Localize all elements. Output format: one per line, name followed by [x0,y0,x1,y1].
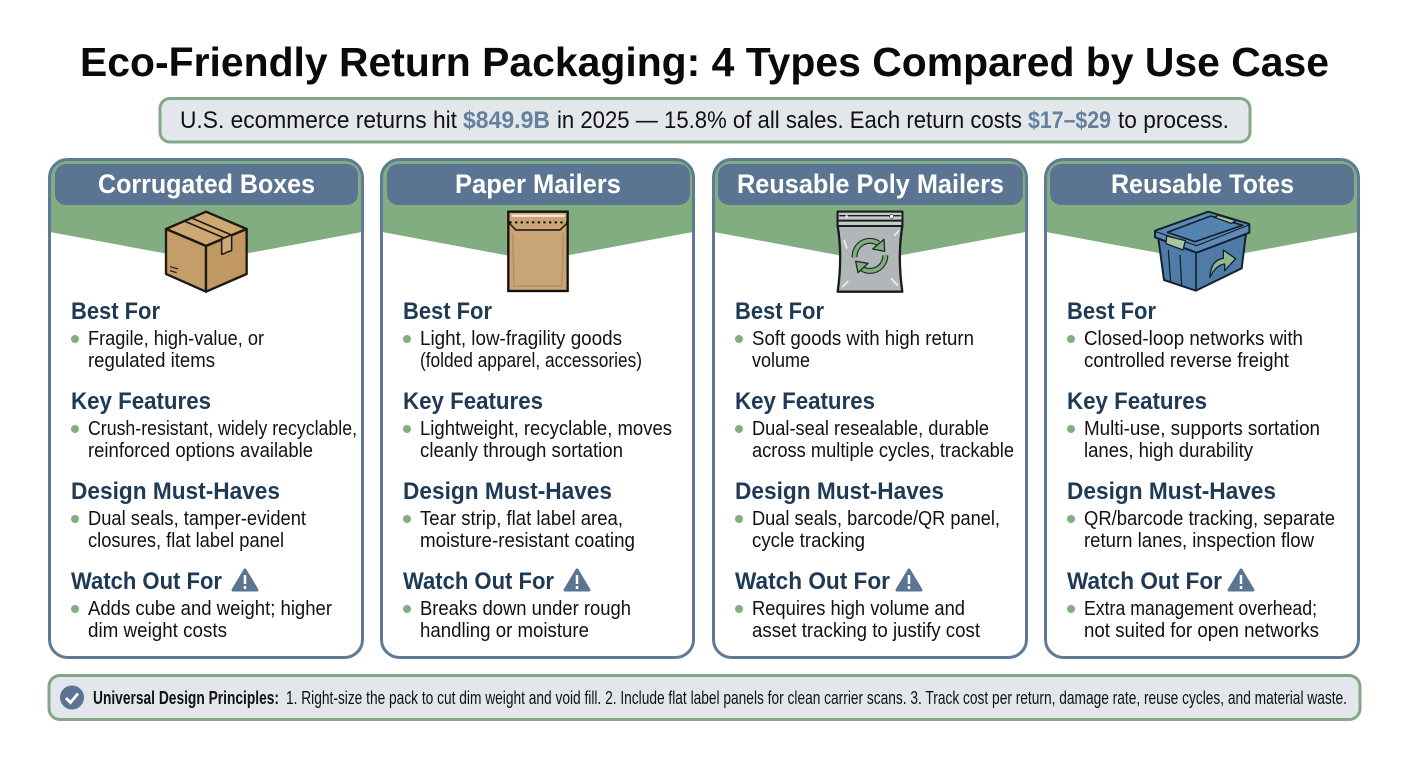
design must-haves: QR/barcode tracking, separate [1084,507,1335,530]
watch out for: Breaks down under rough [420,597,631,620]
key features: reinforced options available [88,439,313,462]
design must-haves [735,478,1000,552]
design must-haves: Design Must-Haves [1067,478,1276,505]
key features [71,388,357,462]
design must-haves: Design Must-Haves [403,478,612,505]
watch out for: Watch Out For [735,568,890,595]
icon: paper mailer [508,212,568,291]
watch out for: Extra management overhead; [1084,597,1317,620]
stats banner: $849.9B [463,107,550,134]
key features: Key Features [403,388,543,415]
watch out for: asset tracking to justify cost [752,619,980,642]
stats banner: $17–$29 [1028,107,1111,134]
key features [735,388,1014,462]
best for: regulated items [88,349,215,372]
key features [403,388,672,462]
design must-haves: Dual seals, tamper-evident [88,507,306,530]
best for: Light, low-fragility goods [420,327,622,350]
watch out for: Adds cube and weight; higher [88,597,332,620]
key features: cleanly through sortation [420,439,623,462]
design must-haves: cycle tracking [752,529,865,552]
panel: reusable totes [1046,160,1358,658]
key features: across multiple cycles, trackable [752,439,1014,462]
best for: Best For [1067,298,1156,325]
icon: cardboard box [166,212,247,292]
stats banner: in 2025 — 15.8% of all sales. Each return costs [557,107,1022,134]
watch out for: Watch Out For [403,568,554,595]
best for [403,298,642,372]
best for: Fragile, high-value, or [88,327,264,350]
design must-haves: Design Must-Haves [71,478,280,505]
best for [735,298,974,372]
watch out for: handling or moisture [420,619,589,642]
stats banner: to process. [1118,107,1229,134]
best for: (folded apparel, accessories) [420,349,642,372]
watch out for [403,568,631,642]
heading: reusable totes: Reusable Totes [1111,169,1294,199]
stats banner [160,98,1250,142]
best for: Best For [71,298,160,325]
design must-haves [71,478,306,552]
key features: Lightweight, recyclable, moves [420,417,672,440]
watch out for [71,568,332,642]
best for [1067,298,1303,372]
watch out for: dim weight costs [88,619,227,642]
key features: lanes, high durability [1084,439,1254,462]
icon: poly mailer [838,212,902,292]
best for: Best For [735,298,824,325]
key features: Key Features [1067,388,1207,415]
best for: controlled reverse freight [1084,349,1289,372]
best for: Soft goods with high return [752,327,974,350]
icon: reusable tote [1155,212,1249,291]
watch out for: Watch Out For [71,568,222,595]
watch out for [735,568,980,642]
key features: Key Features [71,388,211,415]
watch out for: not suited for open networks [1084,619,1319,642]
universal design principles bar [49,676,1360,720]
design must-haves: Dual seals, barcode/QR panel, [752,507,1000,530]
key features: Multi-use, supports sortation [1084,417,1320,440]
key features: Crush-resistant, widely recyclable, [88,417,357,440]
heading: paper mailers: Paper Mailers [455,169,621,199]
best for: volume [752,349,810,372]
design must-haves [403,478,635,552]
universal design principles bar: Universal Design Principles: [93,688,279,708]
best for: Closed-loop networks with [1084,327,1303,350]
title: Eco-Friendly Return Packaging: 4 Types Compared by Use Case [80,39,1329,85]
stats banner: U.S. ecommerce returns hit [180,107,457,134]
best for [71,298,264,372]
best for: Best For [403,298,492,325]
design must-haves: moisture-resistant coating [420,529,635,552]
key features [1067,388,1320,462]
icon: check badge [60,686,84,710]
panel: corrugated boxes [50,160,362,658]
panel: paper mailers [382,160,694,658]
design must-haves [1067,478,1335,552]
watch out for: Watch Out For [1067,568,1222,595]
watch out for: Requires high volume and [752,597,965,620]
design must-haves: return lanes, inspection flow [1084,529,1314,552]
design must-haves: closures, flat label panel [88,529,284,552]
heading: corrugated boxes: Corrugated Boxes [98,169,315,199]
heading: reusable poly mailers: Reusable Poly Mailers [737,169,1004,199]
panel: reusable poly mailers [714,160,1026,658]
key features: Key Features [735,388,875,415]
watch out for [1067,568,1319,642]
design must-haves: Design Must-Haves [735,478,944,505]
key features: Dual-seal resealable, durable [752,417,989,440]
design must-haves: Tear strip, flat label area, [420,507,623,530]
